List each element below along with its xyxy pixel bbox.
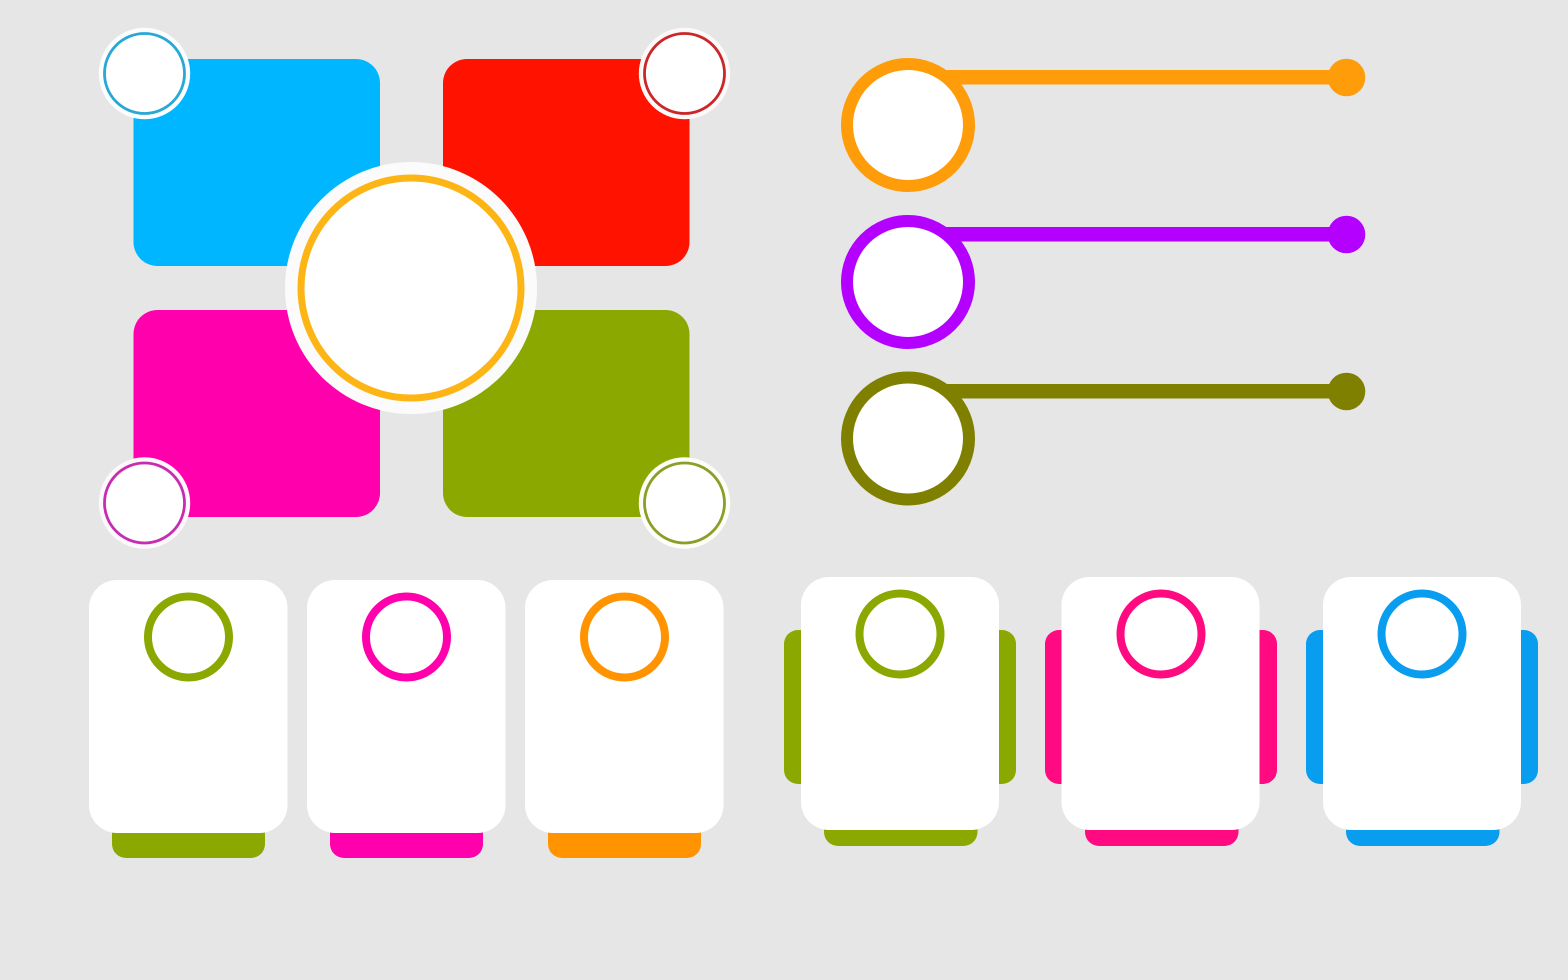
- panel: cards with side tabs: [784, 577, 1538, 846]
- blue square: [134, 59, 380, 266]
- row: orange: [847, 59, 1365, 186]
- card: pink: [1045, 577, 1277, 846]
- card: blue: [1306, 577, 1538, 846]
- panel: four-square cluster: [99, 28, 730, 549]
- panel: cards with bottom tab: [89, 580, 724, 858]
- card: magenta: [307, 580, 506, 858]
- row: olive: [847, 373, 1365, 500]
- corner badge: green: [639, 457, 730, 549]
- corner badge: red: [639, 28, 730, 119]
- corner badge: magenta: [99, 457, 190, 549]
- panel: line list: [847, 59, 1365, 499]
- corner badge: blue: [99, 28, 190, 119]
- card: green: [784, 577, 1016, 846]
- magenta square: [134, 310, 380, 517]
- red square: [443, 59, 690, 266]
- green square: [443, 310, 690, 517]
- row: purple: [847, 216, 1365, 343]
- central circle: [285, 162, 537, 414]
- card: orange: [525, 580, 724, 858]
- card: green: [89, 580, 288, 858]
